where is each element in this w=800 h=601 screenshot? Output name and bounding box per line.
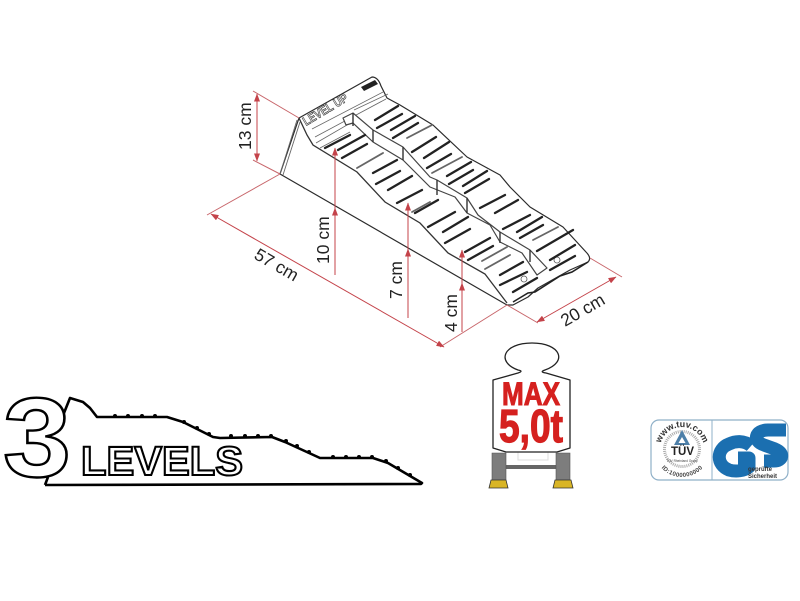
ramp body outline [280,77,590,305]
dimension: 7 cm [386,203,408,318]
certification badge [650,419,789,481]
front holes [521,257,560,282]
GS caption second line: Sicherheit [748,474,777,480]
ramp near edge [299,118,507,303]
dimension: 10 cm: 10 cm [313,216,333,264]
TUV seal: TÜV Rheinland Group [666,459,698,463]
profile bumps [113,414,412,477]
ramp level label: LEVEL UP [300,91,350,129]
wheels [492,453,570,480]
dimension: 57 cm: 57 cm [251,244,302,285]
dimension: 57 cm [207,174,507,347]
TUV seal: ID:1000000000 [662,465,702,477]
LEVELS word: LEVELS [81,438,243,484]
ramp illustration [280,77,590,305]
TUV seal: www.tuv.com [656,422,708,443]
dimension: 10 cm [313,148,335,275]
centre divider [343,113,547,275]
divider posts [353,113,530,262]
max load weight icon [489,343,573,488]
ramp rear side [280,120,300,175]
axle [506,465,556,469]
GS mark [719,430,786,471]
ramp upper thin lines [312,92,388,148]
dimension: 4 cm [441,250,462,332]
dimension: 20 cm [507,258,622,330]
GS caption: geprüfte [748,467,773,473]
tread slots [325,106,575,292]
3 levels badge [3,375,422,500]
TUV seal [656,422,708,477]
badge frame [651,420,788,480]
numeral 3: 3 [3,375,71,500]
lighter ridge slots [357,125,558,269]
MAX label: MAX [502,376,561,412]
dimension: 20 cm: 20 cm [557,289,608,330]
dimension: 13 cm: 13 cm [235,102,255,150]
dimension: 13 cm [235,91,299,174]
front lip [513,262,588,302]
dimension: 7 cm: 7 cm [386,261,406,299]
yellow chocks [489,480,573,488]
TUV seal: TÜV [671,445,694,458]
dimension: 4 cm: 4 cm [441,294,461,332]
5,0t label: 5,0t [499,400,563,452]
ramp logo [361,80,378,91]
weight shape [493,343,570,452]
ramp profile [45,398,422,485]
